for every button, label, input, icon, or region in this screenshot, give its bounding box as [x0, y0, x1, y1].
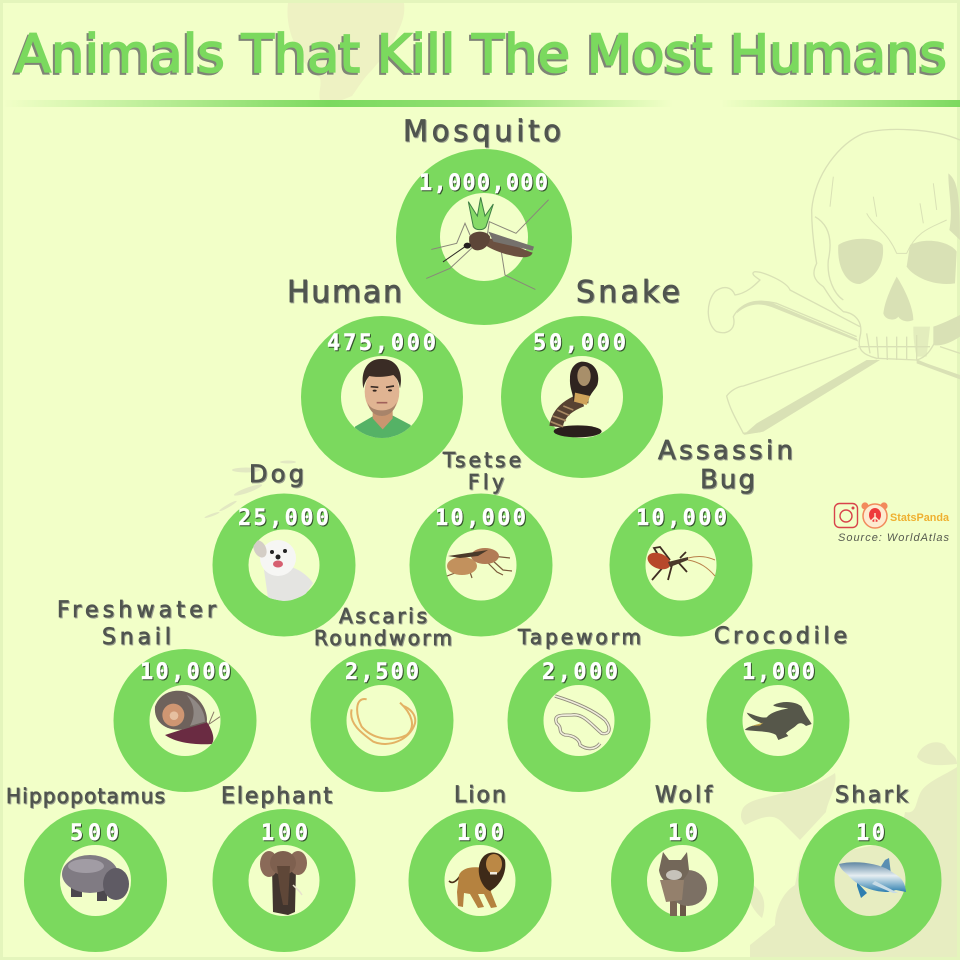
ring: snake	[521, 336, 643, 458]
icon: ascaris roundworm	[351, 699, 415, 744]
ring: assassin bug	[628, 512, 734, 618]
title: Animals That Kill The Most Humans	[15, 24, 947, 85]
panel: elephant	[221, 784, 338, 934]
label: ascaris roundworm	[314, 604, 452, 650]
label: ascaris roundworm: Roundworm	[314, 626, 452, 650]
label: tsetse fly: Fly	[468, 470, 504, 494]
icon: mosquito	[427, 197, 548, 289]
label: ascaris roundworm: Ascaris	[339, 604, 427, 628]
value: assassin bug: 10,000	[636, 506, 727, 531]
brand name: StatsPanda	[890, 512, 950, 524]
label: snake: Snake	[576, 275, 680, 310]
value: crocodile: 1,000	[742, 660, 815, 685]
label: freshwater snail: Freshwater	[57, 598, 217, 623]
label: freshwater snail: Snail	[102, 625, 171, 650]
ring: wolf	[629, 827, 736, 934]
label: elephant: Elephant	[221, 784, 332, 809]
background stain: bottom right	[741, 742, 957, 957]
label: tsetse fly: Tsetse	[442, 448, 521, 472]
value: lion: 100	[457, 821, 504, 846]
source credit: Source: WorldAtlas	[838, 532, 950, 544]
icon: shark	[839, 858, 906, 898]
label: assassin bug	[658, 436, 793, 495]
background stain: near dog	[204, 460, 296, 519]
panel: crocodile	[714, 624, 847, 774]
label: human: Human	[287, 275, 402, 310]
value: freshwater snail: 10,000	[140, 660, 231, 685]
value: tapeworm: 2,000	[542, 660, 618, 685]
ring: dog	[230, 512, 338, 618]
label: hippopotamus: Hippopotamus	[6, 784, 165, 808]
label: tsetse fly	[442, 448, 521, 494]
icon: wolf	[659, 852, 707, 916]
ring: lion	[426, 827, 534, 934]
panel: wolf	[629, 783, 736, 934]
ring: elephant	[230, 827, 338, 934]
value: human: 475,000	[327, 331, 436, 356]
panel: shark	[816, 783, 924, 934]
ring: shark	[816, 827, 924, 934]
label: lion: Lion	[454, 783, 506, 808]
panel: tsetse fly	[428, 448, 534, 618]
value: mosquito: 1,000,000	[419, 171, 548, 196]
ring: crocodile	[724, 667, 832, 774]
icon: crocodile	[745, 702, 812, 740]
label: crocodile: Crocodile	[714, 624, 847, 649]
panel: freshwater snail	[57, 598, 238, 774]
icon: lion	[449, 852, 505, 908]
value: snake: 50,000	[533, 331, 626, 356]
icon: dog	[251, 538, 313, 602]
panel: assassin bug	[628, 436, 793, 618]
icon: stats panda logo	[861, 502, 888, 528]
label: assassin bug: Assassin	[658, 436, 793, 466]
icon: hippopotamus	[62, 855, 129, 901]
panel: human	[287, 275, 443, 458]
value: tsetse fly: 10,000	[435, 506, 526, 531]
value: dog: 25,000	[238, 506, 329, 531]
label: freshwater snail	[57, 598, 217, 650]
label: assassin bug: Bug	[700, 465, 755, 495]
icon: tsetse fly	[447, 548, 512, 578]
panel: snake	[521, 275, 680, 458]
ring: mosquito	[418, 171, 550, 303]
label: tapeworm: Tapeworm	[517, 625, 641, 649]
label: shark: Shark	[835, 783, 908, 808]
ring: human	[321, 336, 443, 458]
panel: lion	[426, 783, 534, 934]
panel: dog	[230, 460, 338, 618]
icon: assassin bug	[645, 547, 715, 580]
panel: hippopotamus	[6, 784, 165, 934]
icon: freshwater snail	[155, 691, 220, 744]
value: hippopotamus: 500	[70, 821, 119, 846]
value: elephant: 100	[261, 821, 308, 846]
value: shark: 10	[856, 821, 885, 846]
title divider bar	[3, 100, 960, 107]
skull and crossbones watermark	[708, 129, 960, 435]
panel: ascaris roundworm	[314, 604, 452, 774]
panel: mosquito	[403, 114, 561, 303]
panel: tapeworm	[517, 625, 641, 774]
ring: tapeworm	[526, 667, 632, 774]
label: dog: Dog	[249, 460, 304, 488]
value: wolf: 10	[668, 821, 698, 846]
background stain: top	[287, 3, 404, 100]
ring: hippopotamus	[42, 827, 149, 934]
icon: snake	[551, 362, 602, 437]
icon: elephant	[260, 851, 307, 915]
ring: tsetse fly	[428, 512, 534, 618]
icon: human	[355, 359, 412, 440]
label: wolf: Wolf	[655, 783, 713, 808]
ring: freshwater snail	[132, 667, 238, 774]
icon: instagram	[834, 504, 858, 528]
icon: tapeworm	[555, 696, 609, 749]
value: ascaris roundworm: 2,500	[345, 660, 419, 685]
label: mosquito: Mosquito	[403, 114, 561, 148]
ring: ascaris roundworm	[328, 667, 436, 774]
